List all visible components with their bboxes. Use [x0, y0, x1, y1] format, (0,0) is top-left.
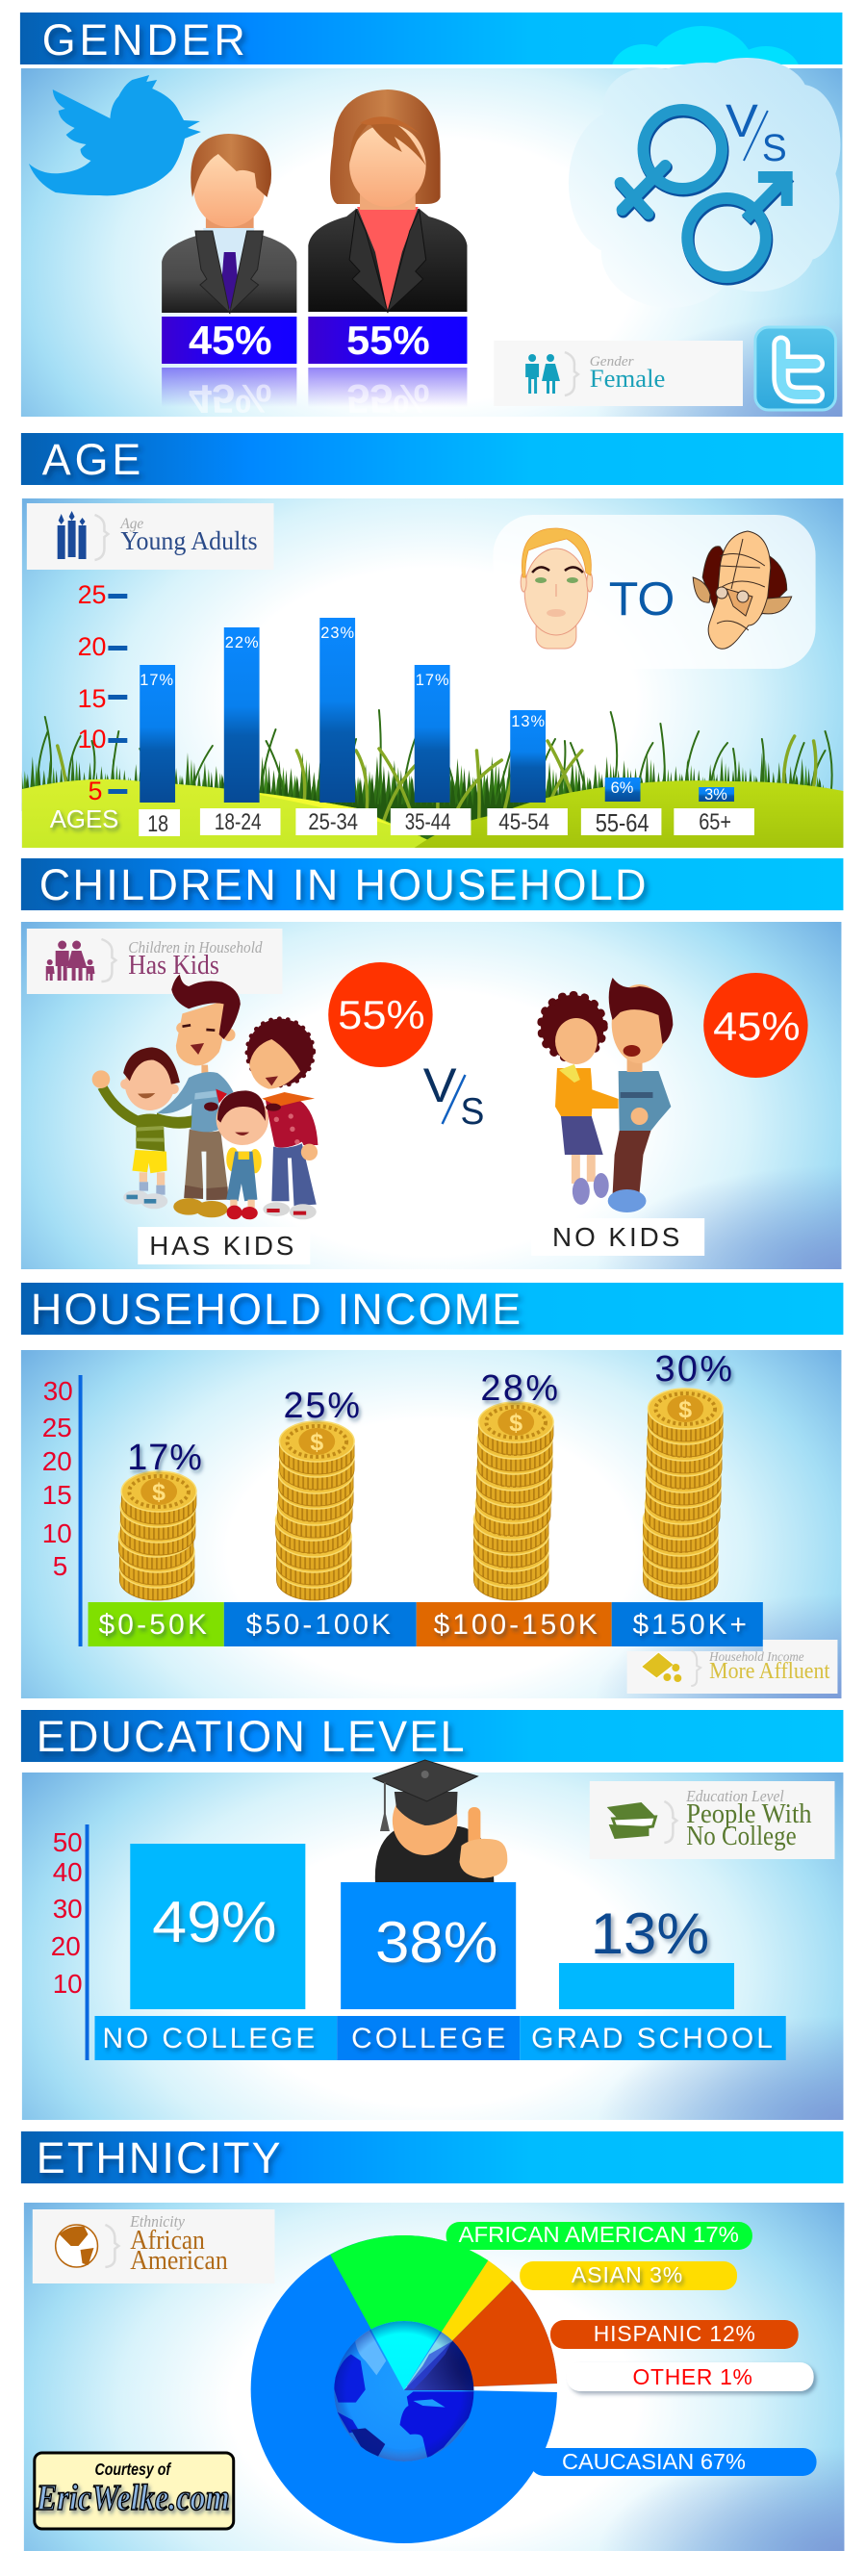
coin stack: $50-100K: 25% [283, 1386, 360, 1426]
panel: household income [21, 1349, 841, 1698]
text: V/S: V [726, 96, 758, 147]
label: more affluent: More Affluent [709, 1659, 830, 1684]
man [608, 978, 673, 1212]
axis: income scale: 20 [42, 1446, 72, 1476]
axis labels: ages: AGES [50, 806, 118, 833]
axis: income scale: 15 [42, 1480, 72, 1510]
heading: ethnicity: ETHNICITY [37, 2133, 280, 2182]
boy [92, 1047, 191, 1209]
panel: gender [21, 58, 842, 421]
coin stack: $50-100K [276, 1386, 360, 1600]
education categories: GRAD SCHOOL [531, 2023, 773, 2054]
stat: has kids 55% [328, 962, 433, 1067]
bar: no college 49%: 49% [152, 1890, 276, 1954]
heading: education level [21, 1710, 843, 1762]
axis: education scale: 50 [53, 1827, 83, 1857]
icon: family [46, 941, 94, 981]
reflection of stats: 45% [189, 376, 272, 421]
coin stack: $100-150K [473, 1368, 558, 1600]
stat: no kids 45%: 45% [713, 1004, 801, 1049]
axis: income scale: 5 [53, 1551, 67, 1581]
chart axis: age scale: 25 [78, 580, 106, 609]
bar chart: age: 17% [140, 672, 173, 689]
woman avatar [308, 89, 467, 312]
pill: caucasian: CAUCASIAN 67% [562, 2449, 746, 2474]
heading: age [21, 433, 843, 485]
bar chart: age: 23% [320, 625, 354, 642]
reflection of stats: 55% [346, 376, 430, 421]
heading: gender: GENDER [42, 15, 245, 64]
bar chart: age: 3% [704, 786, 727, 803]
illustration: couple no kids [541, 978, 673, 1212]
label: african american [33, 2209, 275, 2283]
pie chart: ethnicity [251, 2235, 557, 2543]
coin stack: $100-150K: 28% [480, 1368, 558, 1409]
axis labels: ages [50, 806, 754, 837]
label: gender female: Gender [590, 354, 634, 370]
label: more affluent: Household Income [708, 1650, 804, 1665]
coin stack: $150K+: $ [678, 1396, 692, 1423]
heading: ethnicity [21, 2131, 843, 2183]
axis: income scale [42, 1375, 83, 1646]
education categories: COLLEGE [351, 2023, 505, 2054]
label: age young adults [27, 503, 274, 570]
pill: african american: AFRICAN AMERICAN 17% [459, 2222, 739, 2247]
axis labels: ages: 18-24 [215, 809, 262, 835]
reflection of stats [162, 368, 467, 421]
icon: candles [58, 511, 87, 559]
label: african american: African [130, 2226, 205, 2256]
icon: people [525, 354, 560, 394]
caption: has kids [138, 1227, 310, 1264]
chart axis: age scale [78, 580, 127, 805]
pill: hispanic: HISPANIC 12% [594, 2321, 755, 2346]
chart axis: age scale: 5 [89, 777, 102, 805]
label: more affluent [627, 1640, 837, 1694]
coin stack: $0-50K: 17% [127, 1438, 202, 1478]
stat: male 45% [162, 317, 296, 364]
label: african american: American [130, 2246, 228, 2276]
pill: other: OTHER 1% [633, 2364, 752, 2389]
stat: has kids 55%: 55% [338, 992, 425, 1037]
text: TO: TO [609, 574, 675, 625]
icon: young face [521, 528, 593, 649]
income categories: $100-150K [434, 1609, 598, 1641]
text: V/S: S [762, 127, 787, 169]
text: V/S [423, 1058, 484, 1133]
pill: hispanic [550, 2320, 799, 2349]
stat: no kids 45% [703, 973, 808, 1078]
heading: household income: HOUSEHOLD INCOME [31, 1285, 521, 1334]
axis labels: ages: 18 [147, 811, 168, 837]
panel: children [21, 922, 841, 1269]
bar: grad school 13%: 13% [591, 1901, 709, 1966]
bar: college 38% [341, 1882, 516, 2009]
label: gender female: Female [590, 365, 665, 393]
axis: education scale [51, 1824, 89, 2060]
icon: female symbol [621, 110, 723, 216]
axis: income scale: 25 [42, 1413, 72, 1442]
icon: books [607, 1802, 655, 1839]
icon: old face [693, 531, 792, 649]
education categories [94, 2016, 786, 2060]
bar: college 38%: 38% [375, 1910, 497, 1975]
label: people with no college: No College [686, 1822, 797, 1851]
grass [18, 710, 832, 848]
axis: income scale: 10 [42, 1518, 72, 1548]
axis: education scale: 40 [53, 1857, 83, 1887]
coin stack: $100-150K: $ [509, 1410, 522, 1437]
education categories: NO COLLEGE [102, 2023, 315, 2054]
illustration: family with kids [92, 975, 318, 1219]
coin stack: $50-100K: $ [310, 1429, 323, 1456]
label: has kids: Children in Household [128, 938, 263, 956]
label: age young adults: Young Adults [120, 526, 258, 555]
axis: income scale: 30 [43, 1376, 73, 1406]
caption: no kids [531, 1218, 704, 1256]
label: has kids [27, 929, 282, 994]
income categories: $50-100K [246, 1609, 391, 1641]
pill: other [567, 2362, 814, 2391]
heading: age: AGE [42, 435, 140, 484]
label: people with no college: Education Level [685, 1787, 784, 1805]
bar: grad school 13% [559, 1901, 734, 2009]
stat: female 55% [308, 317, 467, 364]
text: V/S: S [460, 1091, 484, 1133]
chart axis: age scale: 15 [78, 684, 106, 713]
bar chart: age: 17% [416, 672, 449, 689]
label: african american: Ethnicity [129, 2212, 185, 2231]
icon: twitter badge [755, 327, 835, 410]
panel: ethnicity [24, 2203, 844, 2551]
income categories: $150K+ [633, 1609, 747, 1641]
text: V/S: V [423, 1058, 457, 1112]
axis: education scale: 30 [53, 1894, 83, 1924]
woman [541, 995, 619, 1205]
panel: age [18, 498, 843, 848]
axis: education scale: 20 [51, 1931, 81, 1961]
coin stack: $0-50K: $ [152, 1479, 166, 1506]
pill: caucasian [530, 2448, 817, 2476]
pill: asian: ASIAN 3% [572, 2262, 682, 2287]
girl [204, 1089, 281, 1219]
caption: no kids: NO KIDS [552, 1222, 679, 1252]
coin stack: $0-50K [118, 1438, 202, 1600]
icon: twitter bird [29, 75, 201, 195]
credit: courtesy of ericwelke.com [35, 2453, 234, 2529]
mother [247, 1019, 318, 1219]
credit: courtesy of ericwelke.com: EricWelke.com [36, 2478, 230, 2518]
stat: female 55%: 55% [346, 318, 430, 363]
coin stack: $150K+: 30% [654, 1349, 732, 1390]
label: people with no college [590, 1781, 834, 1859]
chart axis: age scale: 20 [78, 632, 106, 661]
axis labels: ages: 35-44 [405, 809, 451, 835]
label: gender female [494, 341, 743, 406]
hills [22, 779, 843, 848]
icon: world [56, 2225, 97, 2267]
label: people with no college: People With [686, 1799, 812, 1829]
icon: money [642, 1652, 681, 1682]
heading: children in household [21, 858, 843, 910]
icon: globe [334, 2321, 473, 2461]
heading: gender [19, 13, 843, 64]
label: has kids: Has Kids [128, 951, 219, 981]
bar chart: age: 13% [511, 713, 545, 730]
icon: male symbol [687, 175, 790, 279]
axis labels: ages: 25-34 [308, 809, 358, 835]
text: V/S [726, 96, 787, 169]
bar: no college 49% [130, 1844, 305, 2009]
bar chart: age [140, 618, 734, 803]
panel: education [22, 1760, 843, 2120]
credit: courtesy of ericwelke.com: Courtesy of [94, 2460, 172, 2479]
bubble: young to old [493, 515, 816, 669]
illustration: graduate [373, 1760, 507, 1882]
cloud backdrop [569, 58, 840, 308]
income categories: $0-50K [98, 1609, 207, 1641]
stat: male 45%: 45% [189, 318, 272, 363]
heading: children in household: CHILDREN IN HOUSEHOLD [39, 860, 646, 909]
father [157, 975, 241, 1217]
chart axis: age scale: 10 [78, 725, 106, 753]
pill: asian [520, 2261, 737, 2290]
heading: education level: EDUCATION LEVEL [37, 1712, 464, 1761]
axis labels: ages: 55-64 [596, 810, 649, 837]
axis labels: ages: 45-54 [498, 809, 549, 835]
caption: has kids: HAS KIDS [149, 1231, 293, 1261]
bar chart: age: 6% [611, 779, 634, 797]
axis labels: ages: 65+ [699, 809, 731, 835]
bar chart: age: 22% [225, 634, 259, 651]
heading: household income [21, 1283, 843, 1335]
income categories [89, 1602, 763, 1646]
coin stack: $150K+ [644, 1349, 732, 1600]
man avatar [162, 134, 296, 313]
axis: education scale: 10 [53, 1969, 83, 1999]
label: age young adults: Age [119, 516, 143, 532]
